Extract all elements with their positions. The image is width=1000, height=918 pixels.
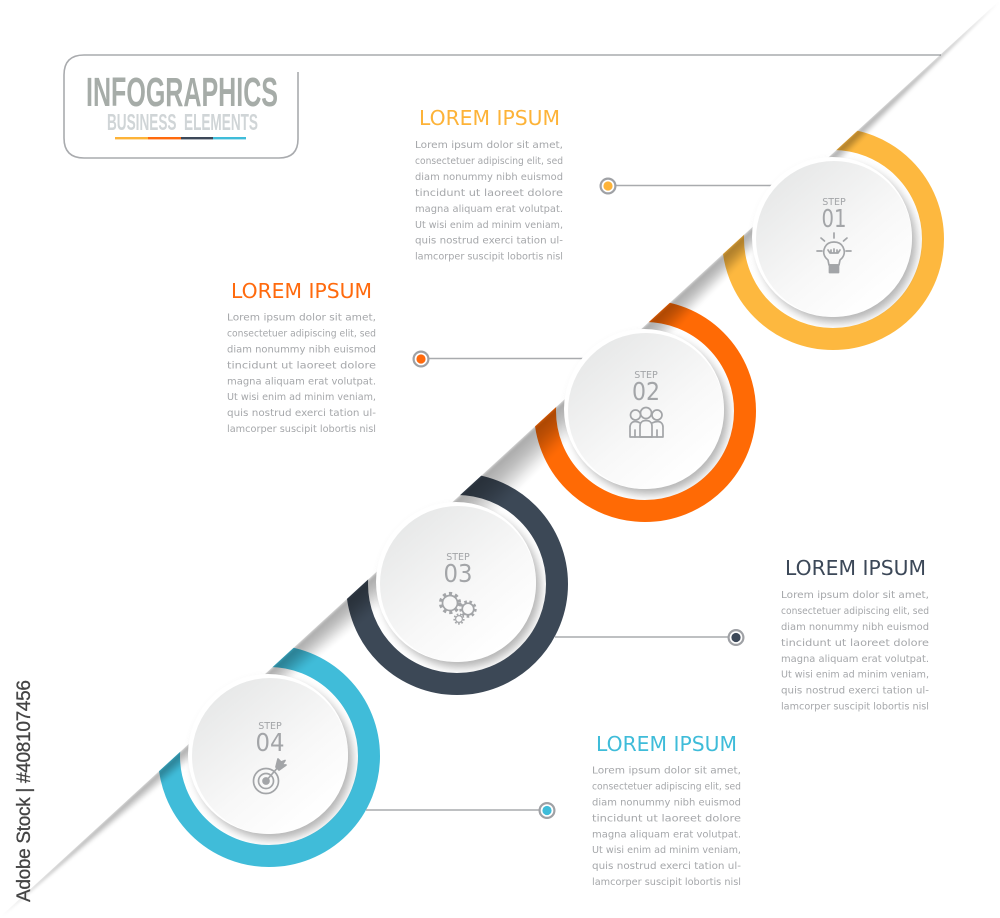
heading: step 4: LOREM IPSUM bbox=[596, 732, 737, 756]
body: step 3: Lorem ipsum dolor sit amet, bbox=[781, 590, 929, 601]
connector: step 4 bbox=[366, 803, 554, 818]
disc: step 3: STEP bbox=[446, 552, 470, 563]
body: step 1: quis nostrud exerci tation ul- bbox=[415, 236, 563, 246]
body: step 2: Lorem ipsum dolor sit amet, bbox=[227, 312, 376, 324]
disc: step 4: STEP bbox=[258, 721, 282, 732]
body: step 1: Ut wisi enim ad minim veniam, bbox=[415, 220, 563, 231]
title frame bbox=[64, 55, 941, 158]
disc: step 3 bbox=[376, 502, 540, 668]
body: step 2: lamcorper suscipit lobortis nisl bbox=[227, 424, 376, 435]
body: step 1: magna aliquam erat volutpat. bbox=[415, 204, 563, 215]
body: step 1: Lorem ipsum dolor sit amet, bbox=[415, 140, 563, 151]
body: step 3: magna aliquam erat volutpat. bbox=[781, 654, 929, 665]
disc: step 4 bbox=[188, 674, 352, 840]
disc: step 1: 01 bbox=[822, 204, 846, 233]
icon: team of people bbox=[630, 408, 663, 437]
body: step 4: tincidunt ut laoreet dolore bbox=[592, 814, 741, 824]
body: step 3 bbox=[781, 590, 929, 712]
connector: step 2 bbox=[414, 352, 588, 366]
body: step 4: diam nonummy nibh euismod bbox=[592, 798, 741, 808]
body: step 2: diam nonummy nibh euismod bbox=[227, 344, 376, 356]
body: step 3: lamcorper suscipit lobortis nisl bbox=[781, 702, 929, 712]
connector: step 1 bbox=[601, 179, 775, 193]
body: step 1: lamcorper suscipit lobortis nisl bbox=[415, 252, 563, 262]
body: step 4: magna aliquam erat volutpat. bbox=[592, 830, 741, 840]
text block: step 4 bbox=[592, 732, 741, 888]
disc: step 4: 04 bbox=[256, 728, 284, 757]
body: step 2: Ut wisi enim ad minim veniam, bbox=[227, 392, 376, 403]
rings bbox=[169, 139, 933, 856]
body: step 2: consectetuer adipiscing elit, sed bbox=[227, 328, 376, 340]
subtitle: business elements: BUSINESS ELEMENTS bbox=[107, 109, 258, 135]
vertical image id label: Adobe Stock | #408107456 bbox=[14, 680, 35, 902]
connector: step 3 bbox=[555, 630, 743, 645]
icon: target with arrow bbox=[254, 759, 286, 794]
text block: step 3 bbox=[781, 556, 929, 712]
icon: gears bbox=[440, 594, 475, 624]
body: step 1 bbox=[415, 140, 563, 262]
text block: step 1 bbox=[415, 106, 563, 262]
disc: step 3: 03 bbox=[444, 559, 472, 588]
body: step 3: diam nonummy nibh euismod bbox=[781, 622, 929, 633]
body: step 2: magna aliquam erat volutpat. bbox=[227, 376, 376, 388]
body: step 4: consectetuer adipiscing elit, sed bbox=[592, 782, 741, 792]
ring: step 1 bbox=[733, 139, 933, 339]
body: step 1: consectetuer adipiscing elit, sed bbox=[415, 156, 563, 167]
text block: step 2 bbox=[227, 279, 376, 435]
colour bar bbox=[115, 137, 246, 139]
body: step 2 bbox=[227, 312, 376, 435]
heading: step 2: LOREM IPSUM bbox=[231, 279, 372, 303]
body: step 3: tincidunt ut laoreet dolore bbox=[781, 638, 929, 649]
heading: step 3: LOREM IPSUM bbox=[785, 556, 926, 580]
body: step 1: tincidunt ut laoreet dolore bbox=[415, 188, 563, 199]
heading: step 1: LOREM IPSUM bbox=[419, 106, 560, 130]
disc: step 2 bbox=[564, 329, 728, 494]
body: step 4: quis nostrud exerci tation ul- bbox=[592, 861, 741, 872]
disc: step 1: STEP bbox=[822, 197, 846, 208]
icon: light bulb bbox=[817, 233, 851, 272]
ring: step 2 bbox=[545, 311, 745, 511]
body: step 2: quis nostrud exerci tation ul- bbox=[227, 408, 376, 419]
body: step 4: lamcorper suscipit lobortis nisl bbox=[592, 877, 741, 888]
ring: step 3 bbox=[357, 484, 557, 684]
disc: step 1 bbox=[752, 157, 916, 322]
body: step 3: quis nostrud exerci tation ul- bbox=[781, 686, 929, 696]
disc: step 2: STEP bbox=[634, 370, 658, 381]
body: step 3: Ut wisi enim ad minim veniam, bbox=[781, 670, 929, 680]
body: step 2: tincidunt ut laoreet dolore bbox=[227, 360, 376, 372]
body: step 4: Lorem ipsum dolor sit amet, bbox=[592, 766, 741, 776]
disc: step 2: 02 bbox=[632, 377, 660, 406]
body: step 4: Ut wisi enim ad minim veniam, bbox=[592, 845, 741, 856]
title block bbox=[86, 69, 278, 139]
body: step 1: diam nonummy nibh euismod bbox=[415, 172, 563, 183]
body: step 3: consectetuer adipiscing elit, sed bbox=[781, 606, 929, 617]
title: infographics: INFOGRAPHICS bbox=[86, 69, 278, 115]
ring: step 4 bbox=[169, 656, 369, 856]
body: step 4 bbox=[592, 766, 741, 888]
